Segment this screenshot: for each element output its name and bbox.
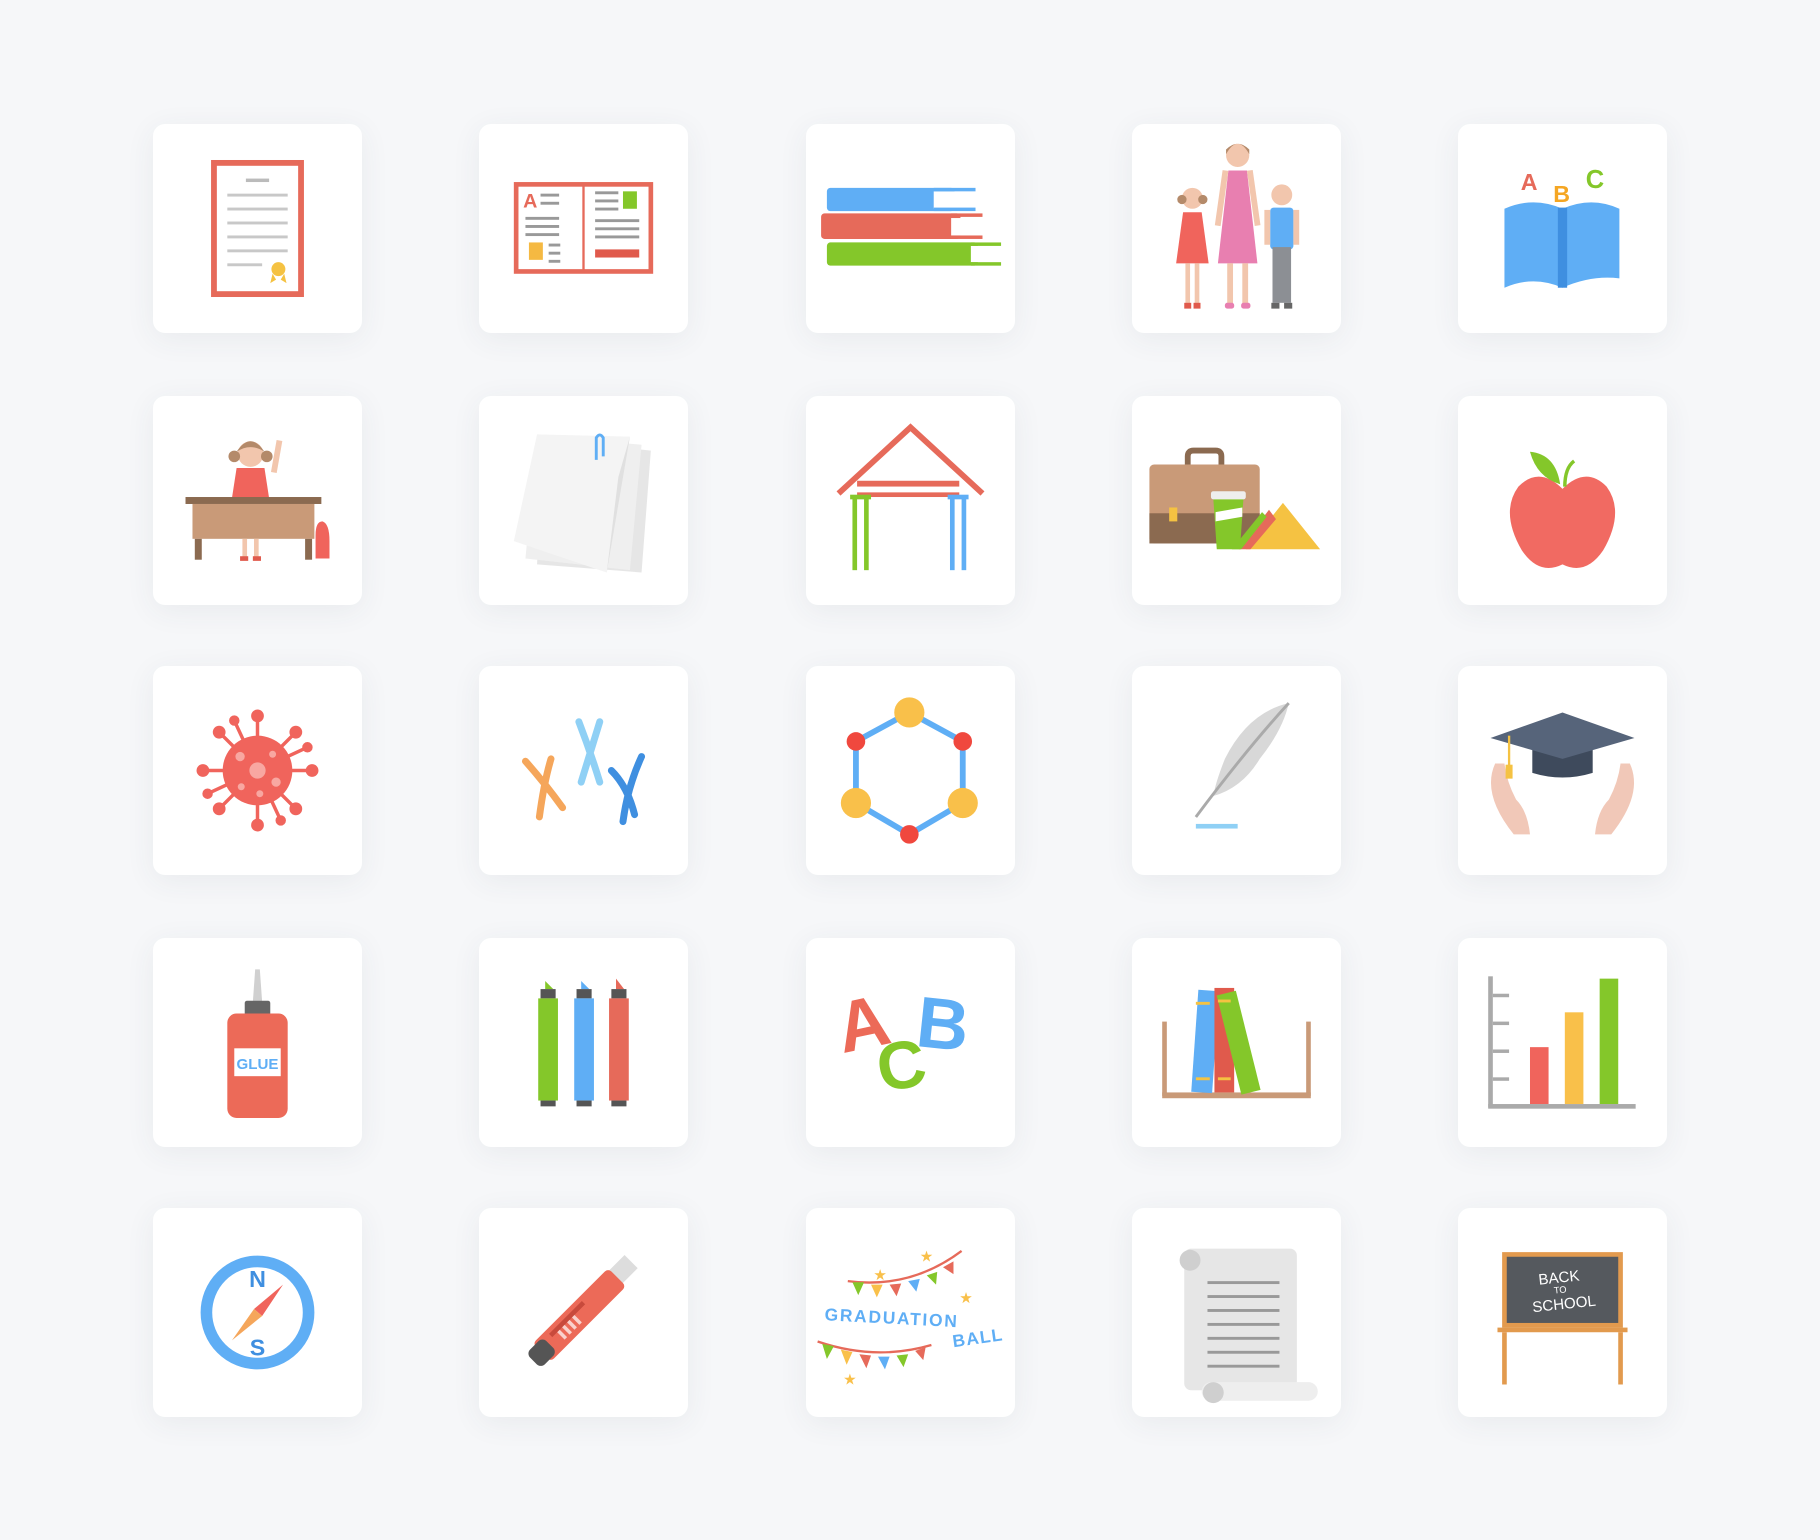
card: graduation ball — [806, 1208, 1015, 1417]
card: chalkboard back to school: TO — [1553, 1284, 1567, 1296]
card: graduation ball: BALL — [951, 1324, 1005, 1351]
card: feather quill — [1132, 666, 1341, 875]
card: open book — [479, 124, 688, 333]
card: virus — [153, 666, 362, 875]
card: ABC letters: C — [871, 1025, 932, 1107]
card: molecule — [806, 666, 1015, 875]
card: house frame — [806, 396, 1015, 605]
card: scroll — [1132, 1208, 1341, 1417]
card: ABC book — [1458, 124, 1667, 333]
card: chalkboard back to school: BACK — [1538, 1268, 1580, 1289]
card: ABC letters — [806, 938, 1015, 1147]
card: ABC book: B — [1553, 181, 1570, 207]
card: utility knife — [479, 1208, 688, 1417]
card: ABC book: C — [1586, 166, 1604, 194]
card: ABC letters: B — [913, 982, 973, 1067]
card: papers with clip — [479, 396, 688, 605]
card: chromosomes — [479, 666, 688, 875]
card: graduation ball: ★ — [843, 1370, 857, 1388]
card: glue bottle — [153, 938, 362, 1147]
card: compass: N — [249, 1266, 266, 1292]
card: bar chart — [1458, 938, 1667, 1147]
card: student at desk — [153, 396, 362, 605]
card: glue bottle: GLUE — [237, 1056, 278, 1073]
card: apple — [1458, 396, 1667, 605]
card: chalkboard back to school: SCHOOL — [1532, 1293, 1597, 1316]
card: family — [1132, 124, 1341, 333]
card: graduation ball: ★ — [873, 1266, 887, 1284]
card: ABC book: A — [1521, 169, 1538, 195]
card: markers — [479, 938, 688, 1147]
card: graduation ball: GRADUATION — [824, 1304, 959, 1331]
card: compass — [153, 1208, 362, 1417]
card: stack of books — [806, 124, 1015, 333]
card: briefcase lunch — [1132, 396, 1341, 605]
card: bookshelf — [1132, 938, 1341, 1147]
card: graduation cap with hands — [1458, 666, 1667, 875]
card: graduation ball: ★ — [920, 1247, 933, 1265]
card: chalkboard back to school — [1458, 1208, 1667, 1417]
card: open book: A — [523, 191, 537, 213]
card: certificate — [153, 124, 362, 333]
card: ABC letters: A — [829, 980, 897, 1069]
card: compass: S — [250, 1334, 265, 1360]
card: graduation ball: ★ — [959, 1289, 973, 1307]
